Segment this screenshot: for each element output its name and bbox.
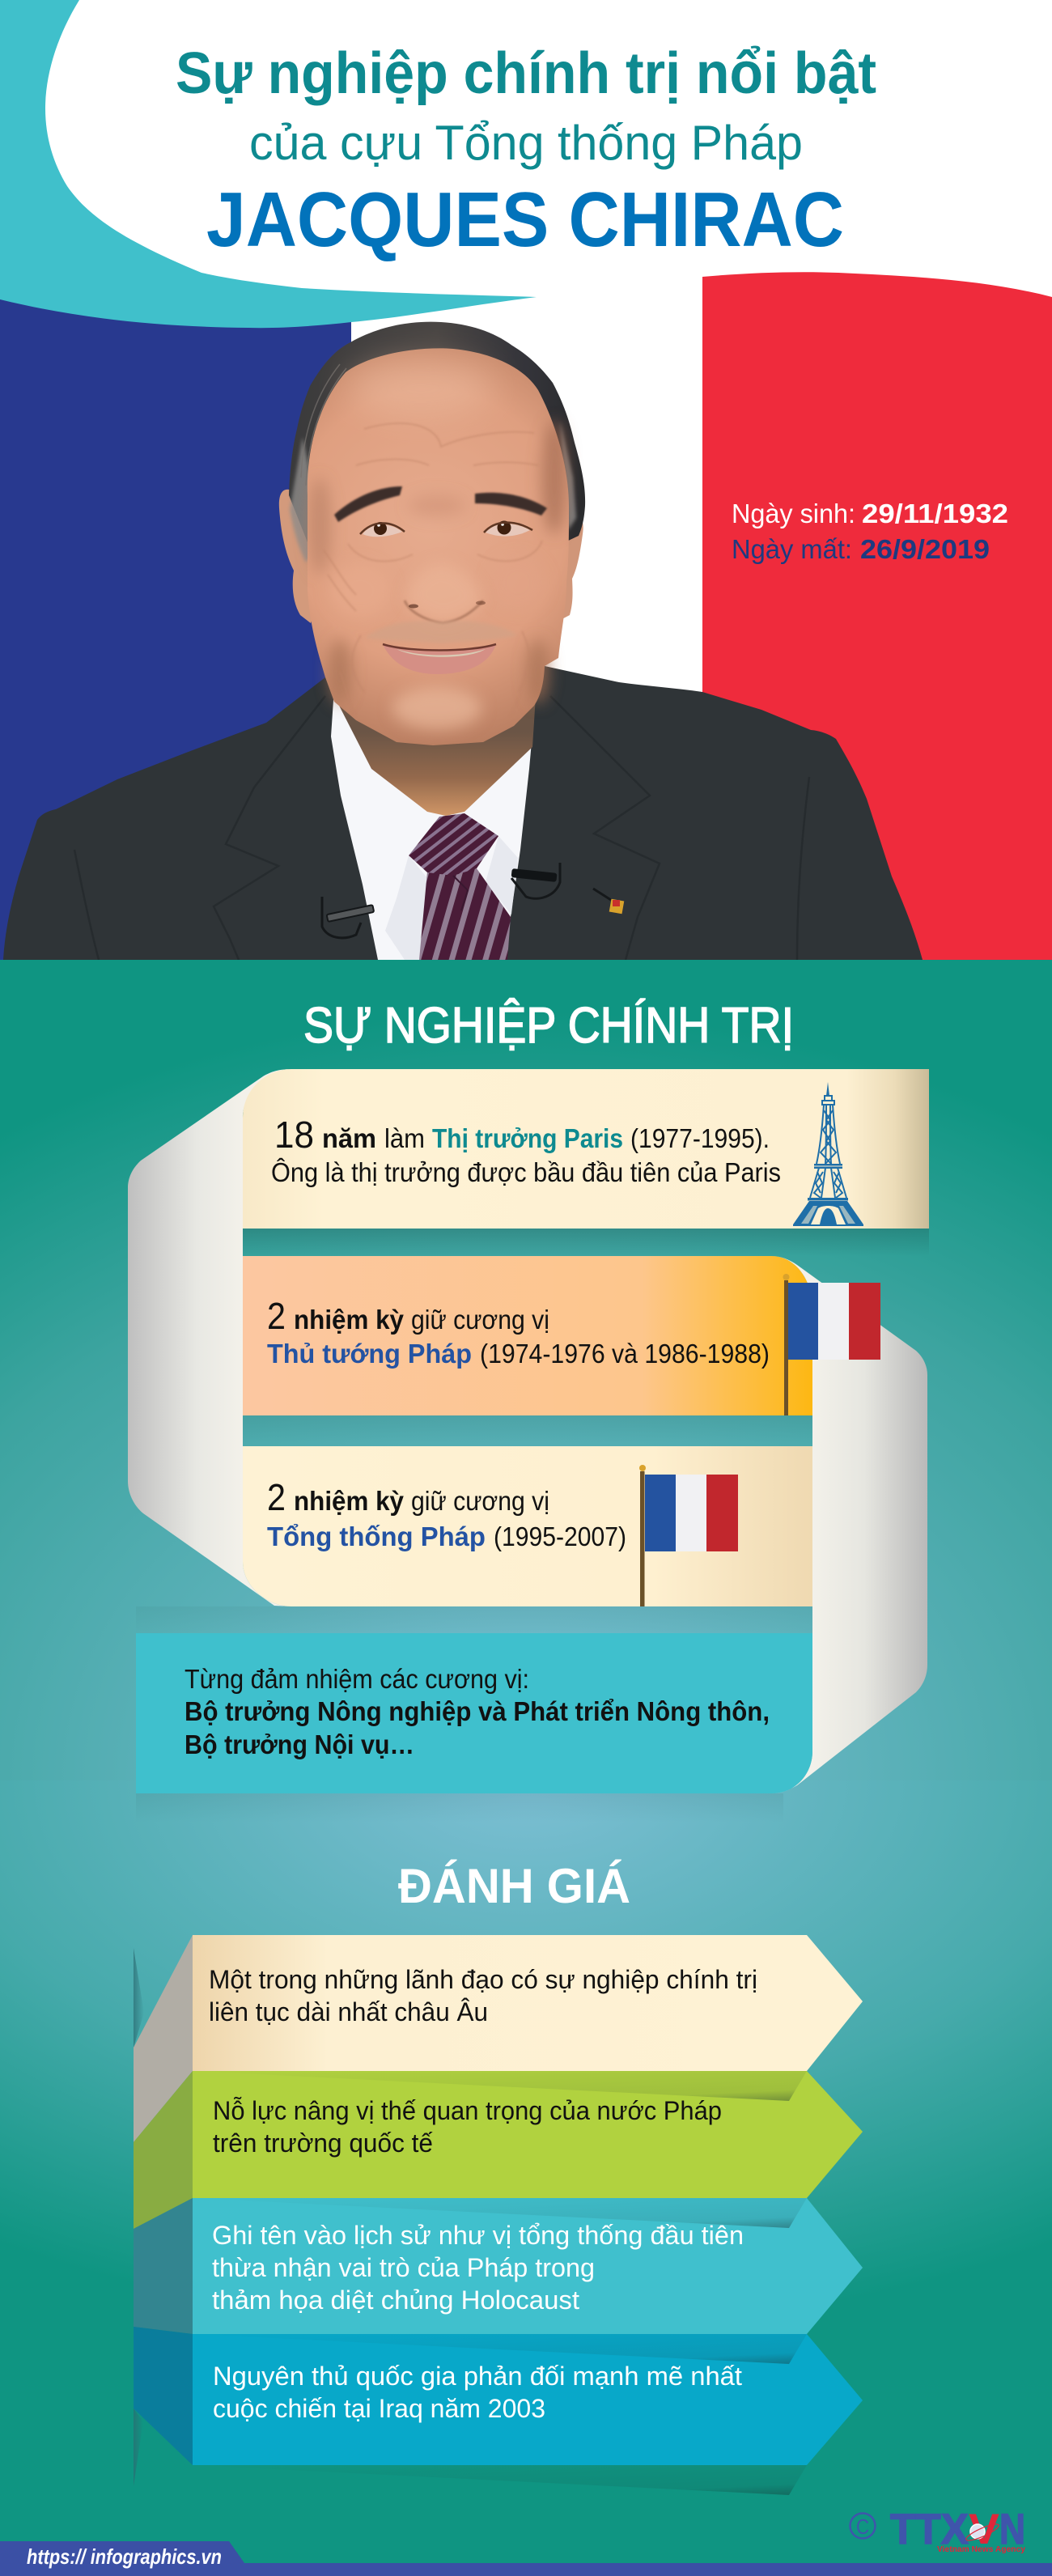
- text: mayor: 18: [274, 1114, 314, 1156]
- title: [176, 41, 876, 263]
- text: other posts: Bộ trưởng Nông nghiệp và Phát triển Nông thôn,: [185, 1696, 770, 1726]
- text: mayor: (1977-1995).: [630, 1123, 770, 1153]
- panel: other ministerial posts: [136, 1633, 812, 1793]
- assessment fold slivers: [134, 1948, 144, 2486]
- assessment arrow side folds: [134, 1935, 193, 2465]
- arrow 1: longest career: Một trong những lãnh đạo có sự nghiệp chính trị: [209, 1965, 757, 1994]
- footer bar with source url: https:// infographics.vn: [27, 2544, 222, 2569]
- title: Sự nghiệp chính trị nổi bật: [176, 41, 876, 106]
- text: president: Tổng thống Pháp: [267, 1521, 486, 1551]
- text: president: (1995-2007): [494, 1521, 626, 1551]
- arrow 3: Holocaust recognition: [193, 2198, 863, 2334]
- text: prime minister: nhiệm kỳ: [294, 1305, 405, 1335]
- arrow 4: Iraq war: cuộc chiến tại Iraq năm 2003: [213, 2394, 545, 2423]
- panel: mayor of Paris: [243, 1069, 929, 1229]
- portrait of Jacques Chirac: [3, 322, 923, 960]
- logo: TTXVN Vietnam News Agency: [850, 2506, 1025, 2554]
- shirt collar shading: [385, 836, 518, 960]
- arrow 1: longest career: [193, 1935, 863, 2071]
- text: president: nhiệm kỳ: [294, 1486, 405, 1516]
- header teal swoosh: [0, 0, 537, 328]
- text: president: 2: [267, 1476, 286, 1518]
- text: mayor: năm: [322, 1123, 376, 1153]
- header white wave: [45, 0, 1052, 297]
- text: prime minister: giữ cương vị: [411, 1305, 549, 1335]
- logo: TTXVN Vietnam News Agency: N: [999, 2506, 1025, 2553]
- hero panel: French flag background: [0, 243, 1052, 960]
- birth and death dates: [732, 499, 1008, 564]
- heading: political career: SỰ NGHIỆP CHÍNH TRỊ: [303, 998, 794, 1054]
- neck: [334, 696, 536, 816]
- heading: assessment: ĐÁNH GIÁ: [398, 1859, 630, 1913]
- grey temple hair: [290, 421, 576, 562]
- logo: TTXVN Vietnam News Agency: V: [969, 2506, 999, 2553]
- arrow 4: Iraq war: [193, 2334, 863, 2465]
- birth and death dates: Ngày sinh:: [732, 499, 855, 528]
- icon: French flag: [783, 1274, 880, 1415]
- white shirt: [331, 688, 536, 960]
- title: của cựu Tổng thống Pháp: [249, 116, 803, 170]
- text: prime minister: 2: [267, 1295, 286, 1337]
- footer bar with source url: [0, 2541, 1052, 2576]
- lower section gradient background: [0, 960, 1052, 2576]
- text: other posts: Bộ trưởng Nội vụ…: [185, 1729, 414, 1759]
- icon: French flag: [639, 1465, 738, 1606]
- text: mayor: làm: [384, 1123, 425, 1153]
- career ribbon left fold: [128, 1069, 291, 1606]
- career ribbon right fold: [771, 1256, 927, 1793]
- eyebrows: [334, 486, 547, 522]
- logo: TTXVN Vietnam News Agency: C: [856, 2514, 869, 2539]
- birth and death dates: 26/9/2019: [860, 534, 990, 564]
- necktie: [409, 813, 511, 960]
- birth and death dates: 29/11/1932: [862, 499, 1008, 528]
- icon: Eiffel Tower: [793, 1082, 863, 1226]
- arrow 3: Holocaust recognition: thảm họa diệt chủng Holocaust: [212, 2285, 579, 2315]
- text: prime minister: Thủ tướng Pháp: [267, 1339, 472, 1369]
- arrow 1: longest career: liên tục dài nhất châu Âu: [209, 1997, 488, 2026]
- text: prime minister: [267, 1295, 770, 1369]
- logo: TTXVN Vietnam News Agency: TTX: [890, 2506, 969, 2553]
- smile and mouth: [365, 621, 518, 674]
- cheek and chin tones: [308, 421, 567, 729]
- suit jacket: [3, 666, 923, 960]
- text: mayor: [271, 1114, 781, 1187]
- hair streaks: [301, 364, 346, 486]
- eyes: [360, 521, 532, 537]
- arrow 2: France's standing: trên trường quốc tế: [213, 2128, 433, 2158]
- logo: TTXVN Vietnam News Agency: Vietnam News Agency: [937, 2545, 1025, 2554]
- text: president: [267, 1476, 626, 1551]
- text: mayor: Thị trưởng Paris: [432, 1123, 623, 1153]
- forehead and face wrinkles: [324, 423, 542, 716]
- text: other posts: Từng đảm nhiệm các cương vị:: [185, 1664, 529, 1694]
- forehead highlight: [348, 361, 494, 416]
- text: mayor: Ông là thị trưởng được bầu đầu tiên của Paris: [271, 1157, 781, 1187]
- text: president: giữ cương vị: [411, 1486, 549, 1516]
- card shadows: [136, 1229, 929, 1823]
- panel: president: [243, 1446, 812, 1606]
- arrow 3: Holocaust recognition: thừa nhận vai trò của Pháp trong: [212, 2253, 595, 2282]
- arrow 3: Holocaust recognition: Ghi tên vào lịch sử như vị tổng thống đầu tiên: [212, 2221, 744, 2250]
- lapel microphones: [322, 863, 560, 938]
- text: other posts: [185, 1664, 770, 1759]
- hair: [289, 322, 585, 542]
- title: JACQUES CHIRAC: [206, 176, 844, 263]
- arrow 4 shadow: [193, 2465, 807, 2495]
- arrow 2: France's standing: Nỗ lực nâng vị thế quan trọng của nước Pháp: [213, 2096, 722, 2125]
- nose: [405, 562, 486, 623]
- arrow 4: Iraq war: Nguyên thủ quốc gia phản đối mạnh mẽ nhất: [213, 2362, 742, 2391]
- jacket lapels: [74, 696, 809, 960]
- lapel pin: [593, 889, 624, 914]
- birth and death dates: Ngày mất:: [732, 534, 852, 564]
- text: prime minister: (1974-1976 và 1986-1988): [480, 1339, 770, 1369]
- face: [308, 348, 569, 745]
- panel: prime minister: [243, 1256, 880, 1415]
- ears: [279, 490, 324, 623]
- arrow 2: France's standing: [193, 2071, 863, 2198]
